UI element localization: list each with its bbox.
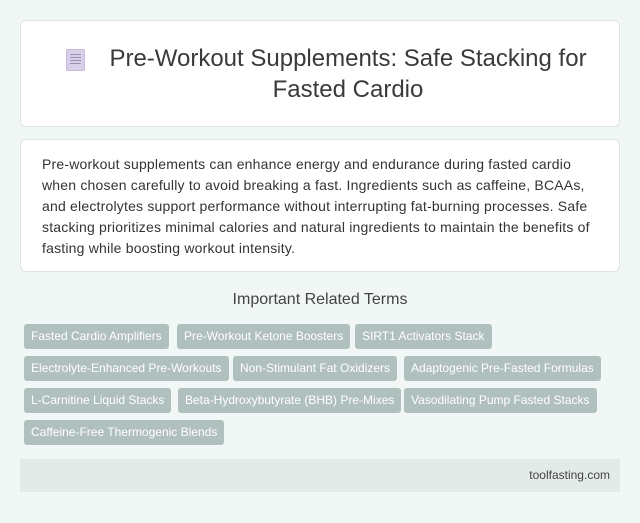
description panel bbox=[20, 139, 620, 272]
title: Pre-Workout Supplements: Safe Stacking for Fasted Cardio bbox=[109, 45, 587, 103]
description panel: stacking prioritizes minimal calories and natural ingredients to maintain the benefits of bbox=[42, 219, 590, 235]
tags: SIRT1 Activators Stack bbox=[362, 329, 484, 343]
tags: Adaptogenic Pre-Fasted Formulas bbox=[411, 361, 594, 375]
tags: Electrolyte-Enhanced Pre-Workouts bbox=[31, 361, 222, 375]
section heading: Important Related Terms bbox=[233, 291, 407, 308]
tags: L-Carnitine Liquid Stacks bbox=[31, 393, 164, 407]
tags: Fasted Cardio Amplifiers bbox=[31, 329, 162, 343]
tags: Pre-Workout Ketone Boosters bbox=[184, 329, 343, 343]
tags: Vasodilating Pump Fasted Stacks bbox=[411, 393, 590, 407]
footer: toolfasting.com bbox=[529, 468, 610, 482]
description panel: and electrolytes support performance without interrupting fat-burning processes. Safe bbox=[42, 198, 587, 214]
tags: Non-Stimulant Fat Oxidizers bbox=[240, 361, 390, 375]
icon: document bbox=[66, 49, 85, 71]
tags: Beta-Hydroxybutyrate (BHB) Pre-Mixes bbox=[185, 393, 394, 407]
description panel: when chosen carefully to avoid breaking a fast. Ingredients such as caffeine, BCAAs, bbox=[42, 177, 585, 193]
description panel: Pre-workout supplements can enhance energy and endurance during fasted cardio bbox=[42, 156, 571, 172]
header panel bbox=[20, 20, 620, 127]
description panel: fasting while boosting workout intensity. bbox=[42, 240, 295, 256]
tags: Caffeine-Free Thermogenic Blends bbox=[31, 425, 217, 439]
footer bbox=[20, 459, 620, 492]
